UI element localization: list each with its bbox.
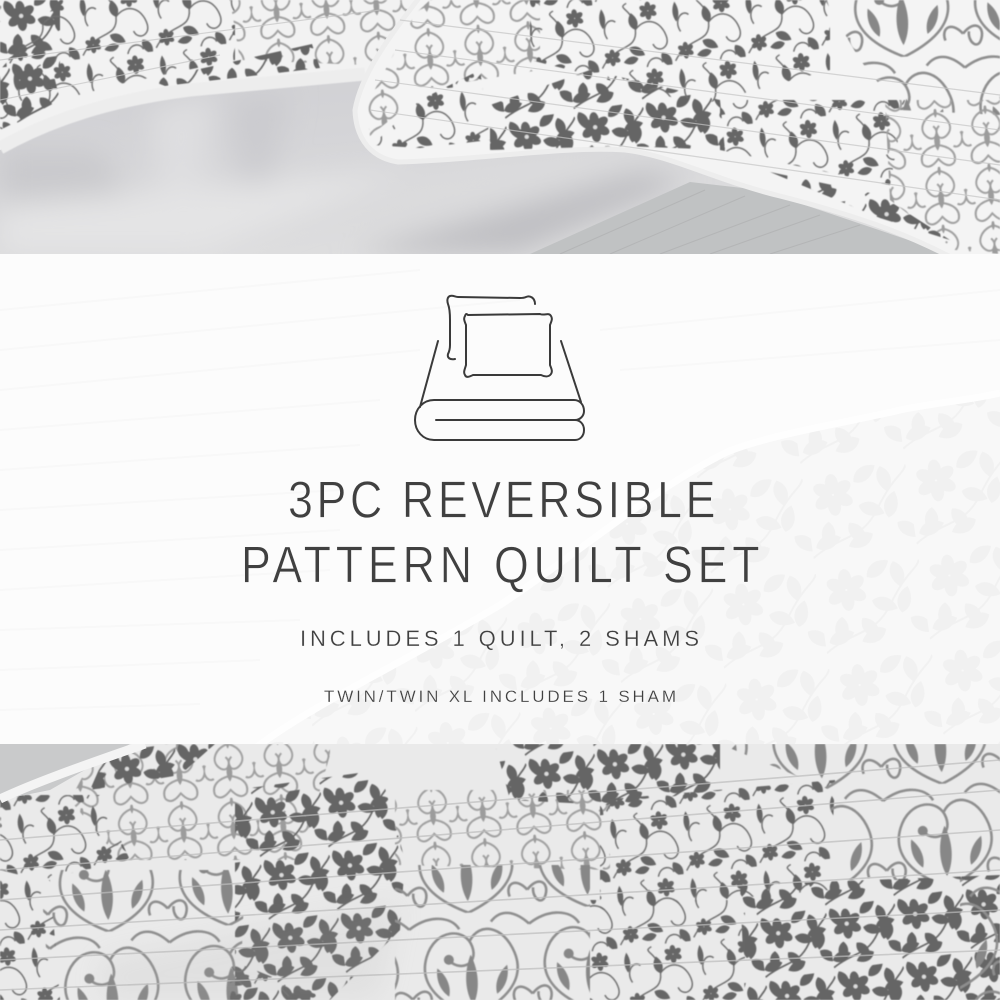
right pillow — [355, 0, 1000, 262]
gray sheet corner with piping — [0, 744, 130, 800]
subtitle: includes: INCLUDES 1 QUILT, 2 SHAMS — [300, 626, 699, 651]
faint stripes on band — [0, 270, 1000, 710]
band: reversed quilt corner — [240, 393, 1000, 760]
sheet folds — [8, 110, 674, 254]
icon: back pillow — [447, 296, 535, 359]
top photo: pillows on sheet — [0, 0, 1000, 262]
title: PATTERN QUILT SET — [241, 536, 760, 594]
title — [241, 471, 760, 594]
quilting stitch lines — [0, 10, 1000, 200]
title: 3PC REVERSIBLE — [288, 471, 715, 529]
note: twin size: TWIN/TWIN XL INCLUDES 1 SHAM — [324, 687, 676, 706]
quilting lines and shading — [0, 760, 1000, 990]
icon: front pillow — [464, 314, 552, 377]
bottom photo: quilt pattern close-up — [0, 744, 1000, 1000]
striped quilt underneath — [530, 182, 950, 254]
patchwork — [0, 744, 1000, 1000]
white center band — [270, 400, 1000, 744]
icon: folded quilt with two pillows — [415, 296, 584, 440]
icon: folded quilt — [415, 341, 584, 440]
left pillow — [0, 0, 440, 150]
